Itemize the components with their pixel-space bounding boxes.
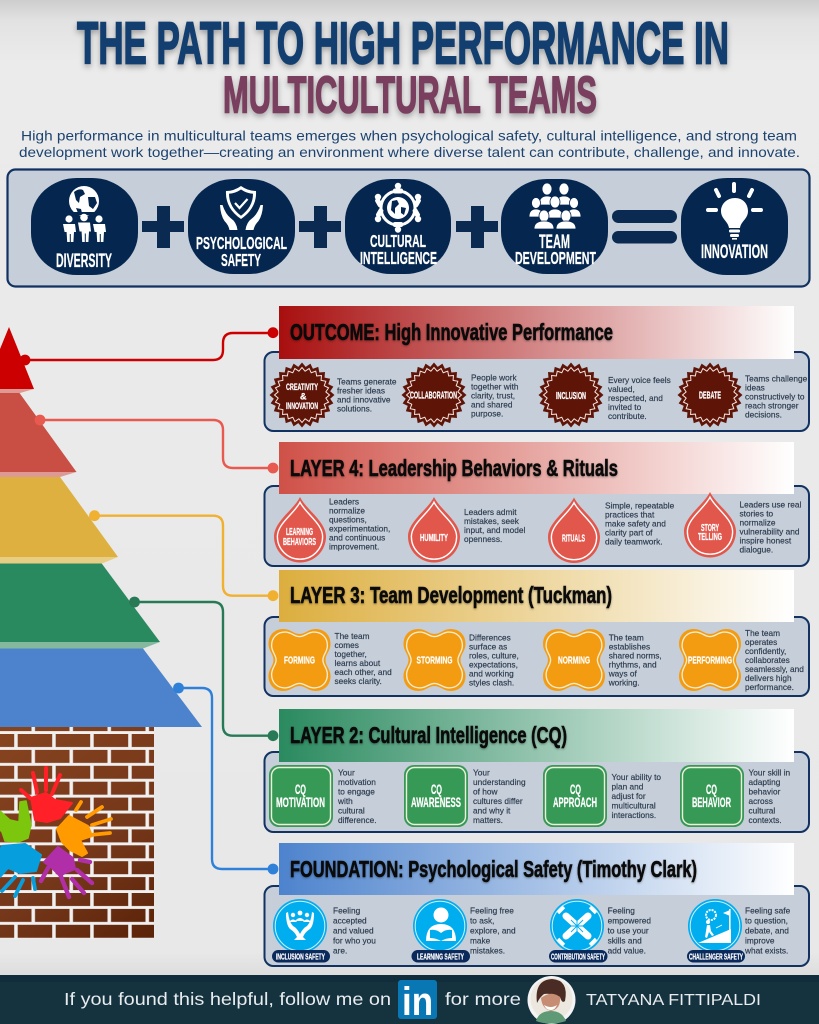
icon: colored handprints [0, 768, 111, 897]
footer text: follow prompt: If you found this helpful, follow me on [64, 989, 391, 1009]
item: inclusion: respected, and [608, 393, 663, 403]
item: debate [678, 362, 808, 428]
brick wall [0, 727, 154, 939]
item: cq approach: CQ [570, 782, 581, 797]
connector: layer 4 [35, 415, 278, 473]
icon: globe and people [62, 186, 106, 242]
pill label: challenger safety: CHALLENGER SAFETY [689, 952, 743, 962]
item: collaboration: and shared [471, 400, 513, 410]
item: storming: and working [469, 668, 514, 678]
hand: green [0, 801, 31, 842]
item: cq motivation: with [337, 796, 353, 806]
item: norming [543, 629, 662, 691]
item: performing: seamlessly, and [745, 664, 804, 674]
section: layer 4 [264, 442, 809, 566]
badge: cultural intelligence: INTELLIGENCE [360, 248, 437, 268]
badge: team development: DEVELOPMENT [515, 248, 596, 268]
icon: linkedin: in [402, 980, 433, 1024]
item: performing [679, 628, 804, 692]
header: layer 3: LAYER 3: Team Development (Tuckman) [290, 582, 612, 608]
item: cq behavior: CQ [706, 782, 717, 797]
item: storytelling: dialogue. [740, 544, 773, 554]
item: storytelling: inspire honest [740, 535, 792, 545]
item: cq motivation [269, 765, 377, 827]
item: inclusion: contribute. [608, 411, 647, 421]
item: norming: rhythms, and [609, 659, 657, 669]
item: creativity and innovation: solutions. [337, 404, 372, 414]
connector: foundation [173, 683, 278, 874]
item: norming: establishes [609, 641, 650, 651]
panel: layer 3 items [264, 617, 809, 696]
icon: light bulb [708, 184, 761, 240]
panel: innovation equation [8, 170, 810, 286]
item: cq awareness: cultures differ [473, 796, 523, 806]
header: outcome [279, 306, 794, 359]
badge: team development: TEAM [539, 232, 570, 253]
item: cq awareness: and why it [473, 806, 511, 816]
header: layer 2 [279, 709, 794, 762]
item: storming: STORMING [416, 654, 452, 666]
item: inclusion safety: are. [333, 946, 347, 956]
item: learning behaviors: questions, [329, 514, 367, 524]
item: performing: performance. [745, 682, 794, 692]
item: learning safety: Feeling free [470, 906, 514, 916]
item: performing: delivers high [745, 673, 792, 683]
panel: layer 2 items [264, 752, 809, 832]
item: learning behaviors: BEHAVIORS [283, 536, 316, 548]
item: storming: styles clash. [469, 677, 514, 687]
item: inclusion: Every voice feels [608, 375, 671, 385]
header: layer 3 [279, 570, 794, 622]
item: contribution safety [549, 899, 651, 962]
section: foundation [264, 843, 809, 966]
item: cq awareness: of how [473, 786, 498, 796]
item: challenger safety: Feeling safe [745, 906, 791, 916]
item: storming: roles, culture, [469, 650, 519, 660]
subtitle text: development work together—creating an environment where diverse talent can contribute, challenge, and innovate. [19, 144, 800, 160]
item: performing: confidently, [745, 646, 786, 656]
operator: equals [612, 210, 677, 244]
section: outcome [264, 306, 809, 431]
item: rituals: Simple, repeatable [605, 501, 675, 511]
item: debate: ideas [745, 383, 765, 393]
item: contribution safety: to use your [608, 926, 649, 936]
item: cq approach: APPROACH [553, 795, 597, 810]
portrait photo [528, 976, 576, 1024]
panel: foundation items [264, 886, 809, 966]
item: cq awareness: matters. [473, 815, 503, 825]
item: debate: decisions. [745, 410, 782, 420]
item: storytelling: STORY [701, 522, 719, 534]
item: forming [268, 629, 392, 691]
pill label: inclusion safety: INCLUSION SAFETY [276, 952, 325, 962]
section: layer 2 [264, 709, 809, 832]
item: storytelling [684, 492, 801, 558]
header: outcome: OUTCOME: High Innovative Performance [290, 319, 613, 345]
item: creativity and innovation: and innovative [337, 394, 391, 404]
item: inclusion: INCLUSION [556, 391, 586, 402]
badge: cultural intelligence [345, 179, 451, 274]
item: learning behaviors: experimentation, [329, 523, 390, 533]
pyramid [0, 327, 202, 727]
item: learning safety: explore, and [470, 926, 516, 936]
pill label: contribution safety: CONTRIBUTION SAFETY [551, 952, 605, 962]
item: forming: FORMING [284, 654, 315, 666]
icon: globe ringed by people [374, 183, 422, 233]
item: contribution safety: add value. [608, 946, 646, 956]
panel: outcome items [264, 352, 809, 431]
badge: psychological safety: PSYCHOLOGICAL [196, 233, 287, 253]
item: learning behaviors: improvement. [329, 541, 379, 551]
item: collaboration: purpose. [471, 408, 503, 418]
item: challenger safety: improve [745, 936, 775, 946]
badge: cultural intelligence: CULTURAL [370, 231, 426, 251]
item: collaboration: together with [471, 382, 519, 392]
badge: diversity: DIVERSITY [56, 251, 112, 272]
pill label: learning safety: LEARNING SAFETY [417, 952, 464, 962]
icon: climber with flag [698, 909, 731, 943]
pyramid layer 2 (green) [0, 564, 160, 648]
item: cq awareness: Your [473, 768, 490, 778]
item: cq behavior: adapting [748, 777, 781, 787]
item: rituals: clarity part of [605, 528, 653, 538]
item: rituals: practices that [605, 510, 655, 520]
item: learning behaviors: normalize [329, 505, 365, 515]
item: cq awareness: CQ [431, 782, 442, 797]
item: performing: PERFORMING [688, 654, 732, 666]
item: cq motivation: CQ [295, 782, 306, 797]
item: creativity and innovation: Teams generate [337, 376, 397, 386]
item: cq approach: interactions. [612, 810, 656, 820]
item: storytelling: Leaders use real [740, 499, 801, 509]
item: cq motivation: cultural [338, 806, 365, 816]
item: storytelling: stories to [740, 508, 774, 518]
item: cq motivation: difference. [338, 815, 377, 825]
icon: team group [529, 183, 581, 229]
badge: diversity [31, 178, 138, 275]
header: layer 4: LAYER 4: Leadership Behaviors & Rituals [290, 455, 618, 481]
item: challenger safety [687, 899, 791, 962]
subtitle text [19, 128, 800, 160]
item: rituals [548, 498, 675, 563]
item: storming: surface as [469, 641, 507, 651]
connector: layer 2 [129, 597, 278, 741]
item: forming: each other, and [334, 667, 392, 677]
item: storytelling: vulnerability and [740, 526, 800, 536]
item: cq approach: plan and [612, 782, 644, 792]
item: debate: Teams challenge [745, 374, 808, 384]
operator: plus [299, 206, 341, 248]
item: forming: together, [334, 649, 367, 659]
item: contribution safety: skills and [608, 936, 642, 946]
icon: shield and hands [220, 186, 263, 230]
item: cq behavior: cultural [748, 806, 775, 816]
item: inclusion safety [272, 899, 376, 962]
item: cq behavior: BEHAVIOR [692, 795, 731, 810]
pyramid layer: outcome (red) [0, 327, 34, 393]
item: cq approach: Your ability to [612, 772, 661, 782]
item: storming: Differences [469, 632, 511, 642]
footer text: for more: for more [445, 989, 521, 1009]
connector: layer 3 [89, 510, 278, 601]
item: learning safety [412, 899, 516, 962]
operator: plus [142, 206, 184, 248]
item: inclusion safety: for who you [333, 936, 376, 946]
item: humility: input, and model [464, 525, 526, 535]
item: learning safety: mistakes. [470, 946, 505, 956]
item: cq motivation: motivation [338, 777, 376, 787]
title [77, 10, 729, 124]
footer bar [0, 975, 819, 1024]
footer text: author name: TATYANA FITTIPALDI [586, 992, 761, 1009]
item: creativity and innovation: CREATIVITY [286, 382, 318, 393]
item: humility: Leaders admit [464, 507, 517, 517]
item: cq approach: adjust for [612, 791, 646, 801]
item: cq behavior: Your skill in [748, 768, 791, 778]
item: debate: DEBATE [699, 390, 721, 402]
item: norming: The team [609, 632, 644, 642]
hand: red [21, 768, 72, 822]
item: collaboration: clarity, trust, [471, 390, 515, 400]
icon: person reading [426, 908, 456, 941]
item: rituals: make safety and [605, 519, 666, 529]
item: learning safety: make [470, 936, 491, 946]
item: cq awareness: AWARENESS [411, 795, 461, 810]
hand: blue [0, 844, 41, 896]
item: learning behaviors: and continuous [329, 532, 385, 542]
item: humility [408, 497, 526, 562]
header: foundation [279, 843, 794, 895]
item: cq behavior: contexts. [748, 815, 782, 825]
item: humility: HUMILITY [420, 532, 448, 544]
item: cq motivation: Your [338, 768, 355, 778]
item: contribution safety: empowered [608, 916, 651, 926]
item: learning behaviors [274, 496, 390, 562]
pyramid layer 3 (yellow) [0, 477, 118, 564]
item: challenger safety: debate, and [745, 926, 789, 936]
item: storming: expectations, [469, 659, 518, 669]
item: cq approach [543, 765, 661, 827]
operator: plus [456, 206, 498, 248]
item: cq awareness: understanding [473, 777, 526, 787]
item: norming: shared norms, [609, 650, 662, 660]
header: layer 4 [279, 442, 794, 494]
item: cq approach: multicultural [612, 800, 656, 810]
badge: psychological safety [188, 179, 295, 274]
item: inclusion safety: and valued [333, 926, 374, 936]
hand: orange [57, 802, 111, 856]
item: learning behaviors: LEARNING [286, 526, 313, 538]
item: inclusion safety: accepted [333, 916, 367, 926]
item: collaboration: COLLABORATION [410, 390, 457, 402]
item: challenger safety: what exists. [744, 946, 788, 956]
item: collaboration: People work [471, 372, 518, 382]
item: creativity and innovation [270, 362, 397, 428]
subtitle text: High performance in multicultural teams emerges when psychological safety, cultural intelligence, and strong team [21, 128, 797, 144]
item: forming: seeks clarity. [334, 676, 382, 686]
item: storming [404, 629, 519, 691]
item: inclusion: valued, [608, 384, 635, 394]
section: layer 3 [264, 570, 809, 696]
item: cq behavior: behavior [748, 786, 781, 796]
item: creativity and innovation: fresher ideas [337, 386, 385, 396]
panel: layer 4 items [264, 486, 809, 566]
item: rituals: daily teamwork. [605, 537, 663, 547]
connector: outcome [20, 327, 278, 365]
badge: team development [501, 179, 608, 274]
item: learning behaviors: Leaders [329, 496, 359, 506]
item: storytelling: TELLING [698, 531, 722, 543]
item: contribution safety: Feeling [608, 906, 635, 916]
badge: innovation: INNOVATION [701, 242, 768, 263]
item: norming: NORMING [558, 654, 590, 666]
item: challenger safety: to question, [745, 916, 788, 926]
icon: people in hands [286, 911, 314, 940]
item: creativity and innovation: INNOVATION [286, 401, 318, 412]
item: humility: mistakes, seek [464, 516, 520, 526]
item: forming: learns about [334, 658, 381, 668]
item: rituals: RITUALS [562, 532, 585, 544]
item: inclusion safety: Feeling [333, 906, 361, 916]
badge: psychological safety: SAFETY [221, 250, 261, 270]
item: cq motivation: to engage [338, 787, 375, 797]
item: norming: working. [608, 677, 640, 687]
item: inclusion: invited to [608, 402, 642, 412]
item: cq behavior: across [748, 796, 773, 806]
item: humility: openness. [464, 534, 502, 544]
item: storytelling: normalize [740, 517, 776, 527]
item: collaboration [402, 362, 519, 428]
item: performing: operates [745, 637, 777, 647]
item: cq motivation: MOTIVATION [276, 795, 325, 810]
item: creativity and innovation: & [300, 392, 307, 402]
item: debate: constructively to [745, 392, 805, 402]
item: performing: The team [745, 628, 780, 638]
item: learning safety: to ask, [470, 916, 494, 926]
icon: stacked hands [558, 907, 596, 945]
badge: innovation [681, 178, 788, 275]
item: forming: The team [334, 631, 370, 641]
item: forming: comes [334, 640, 359, 650]
item: cq awareness [404, 765, 526, 827]
item: debate: reach stronger [745, 401, 799, 411]
item: inclusion [538, 362, 671, 428]
pyramid foundation (blue) [0, 648, 202, 727]
item: norming: ways of [608, 668, 638, 678]
item: performing: collaborates [745, 655, 790, 665]
header: layer 2: LAYER 2: Cultural Intelligence (CQ) [290, 722, 567, 748]
item: cq behavior [680, 765, 791, 827]
hand: purple [41, 847, 92, 897]
pyramid layer 4 (coral) [0, 393, 76, 477]
